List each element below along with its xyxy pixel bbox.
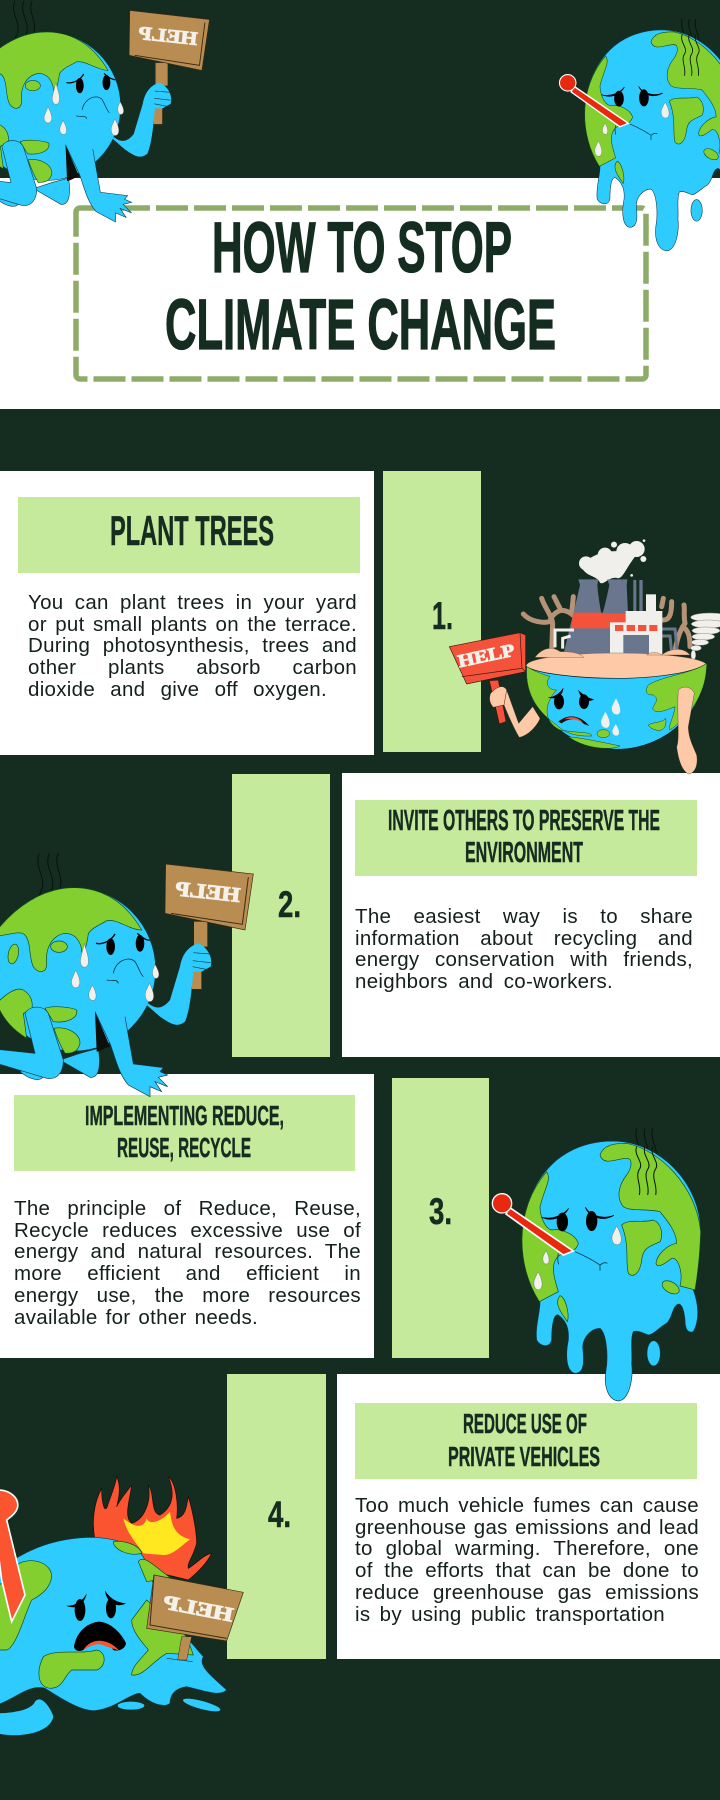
text: invite others <box>355 905 693 993</box>
text: invite others: energy conservation with friends, <box>355 948 693 971</box>
heading box: reduce reuse recycle <box>14 1095 355 1171</box>
text: invite others: The easiest way is to share <box>355 905 693 928</box>
heading box: reduce reuse recycle: IMPLEMENTING REDUCE, <box>85 1100 284 1131</box>
heading box: invite others <box>355 800 697 876</box>
number bar 3: 3. <box>429 1191 452 1232</box>
heading box: reduce reuse recycle: REUSE, RECYCLE <box>117 1132 251 1163</box>
text: plant trees: dioxide and give off oxygen. <box>28 678 327 701</box>
text: private vehicles: to global warming. Therefore, one <box>355 1537 699 1560</box>
number bar 2: 2. <box>278 884 301 925</box>
number bar 1: 1. <box>432 595 453 638</box>
number bar 1 <box>383 471 481 752</box>
text: reduce reuse recycle: Recycle reduces excessive use of <box>14 1219 361 1242</box>
icon: melting earth with thermometer (top) <box>558 19 720 252</box>
icon: earth with factory <box>448 539 720 774</box>
heading box: private vehicles: REDUCE USE OF <box>463 1408 587 1439</box>
panel: invite others <box>342 773 720 1057</box>
number bar 4: 4. <box>268 1494 291 1535</box>
text: private vehicles <box>355 1494 699 1626</box>
icon: crawling earth with help sign <box>0 853 254 1098</box>
heading box: invite others: ENVIRONMENT <box>465 837 583 869</box>
icon: earth with factory: HELP <box>456 640 516 671</box>
icon: crawling earth with help sign: HELP <box>174 878 241 907</box>
icon: crawling earth with help sign (top) <box>0 0 210 222</box>
text: reduce reuse recycle: The principle of Reduce, Reuse, <box>14 1197 361 1220</box>
text: plant trees: or put small plants on the terrace. <box>28 613 357 636</box>
text: private vehicles: of the efforts that can be done to <box>355 1559 699 1582</box>
icon: melting earth with thermometer <box>492 1128 701 1402</box>
panel: reduce reuse recycle <box>0 1074 374 1358</box>
text: reduce reuse recycle: energy and natural resources. The <box>14 1240 361 1263</box>
text: private vehicles: reduce greenhouse gas emissions <box>355 1581 699 1604</box>
text: reduce reuse recycle: more efficient and efficient in <box>14 1262 361 1285</box>
text: plant trees <box>28 591 357 701</box>
text: plant trees: During photosynthesis, trees and <box>28 634 357 657</box>
heading box: private vehicles <box>355 1403 697 1479</box>
text: reduce reuse recycle <box>14 1197 361 1329</box>
number bar 4 <box>227 1374 326 1659</box>
text: plant trees: You can plant trees in your yard <box>28 591 357 614</box>
text: private vehicles: Too much vehicle fumes can cause <box>355 1494 699 1517</box>
text: invite others: neighbors and co‑workers. <box>355 970 613 993</box>
dashed title frame <box>73 205 649 382</box>
text: invite others: information about recycling and <box>355 927 693 950</box>
title: HOW TO STOP <box>212 209 512 288</box>
number bar 3 <box>392 1078 489 1358</box>
text: private vehicles: is by using public transportation <box>355 1603 665 1626</box>
icon: crawling earth with help sign (top): HELP <box>137 23 198 50</box>
panel: title band <box>0 178 720 409</box>
panel: reduce private vehicles <box>337 1374 720 1659</box>
heading box: plant trees <box>18 497 360 573</box>
icon: burning melted earth with help sign: HELP <box>161 1591 235 1627</box>
icon: burning melted earth with help sign <box>0 1476 244 1736</box>
number bar 2 <box>232 774 330 1057</box>
heading box: private vehicles: PRIVATE VEHICLES <box>448 1441 600 1472</box>
text: reduce reuse recycle: available for other needs. <box>14 1306 258 1329</box>
text: private vehicles: greenhouse gas emissions and lead <box>355 1516 699 1539</box>
text: plant trees: other plants absorb carbon <box>28 656 357 679</box>
title <box>165 209 556 365</box>
text: reduce reuse recycle: energy use, the more resources <box>14 1284 361 1307</box>
panel: plant trees <box>0 471 374 755</box>
heading box: plant trees: PLANT TREES <box>110 507 274 554</box>
